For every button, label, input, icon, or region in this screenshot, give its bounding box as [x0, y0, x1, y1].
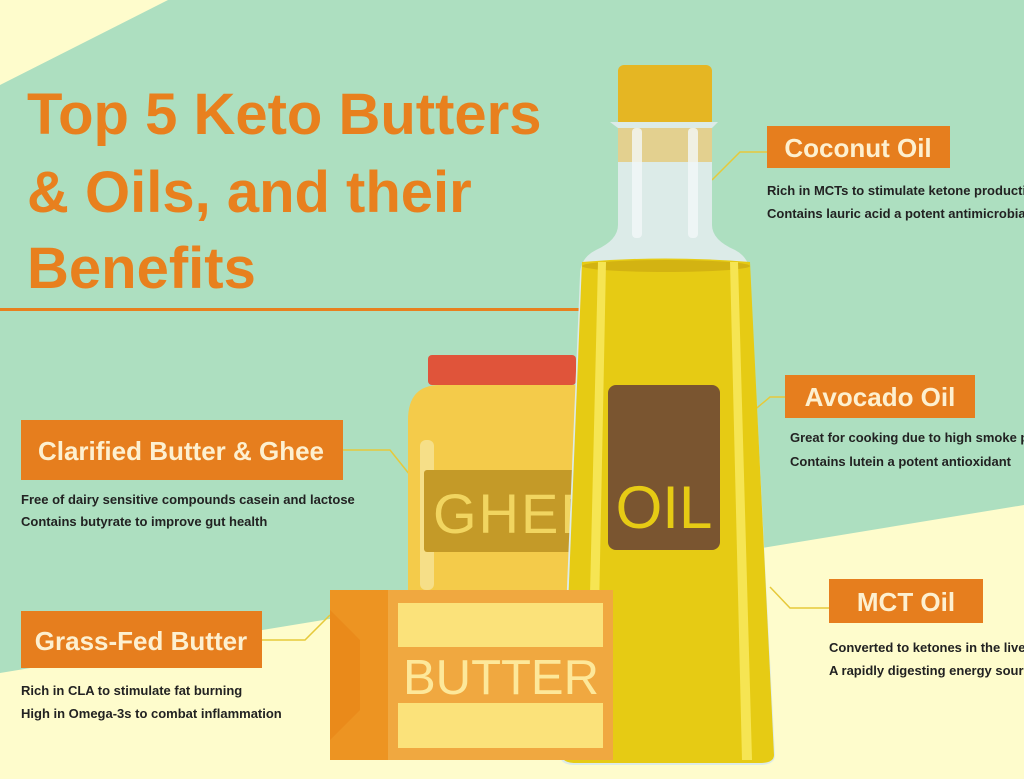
label: clarified butter & ghee: Clarified Butter & Ghee: [38, 436, 324, 466]
label: avocado oil: Avocado Oil: [805, 382, 955, 412]
ghee jar: [408, 355, 600, 600]
label: grass-fed butter: High in Omega-3s to combat inflammation: [21, 706, 282, 721]
label: clarified butter & ghee: Contains butyrate to improve gut health: [21, 514, 267, 529]
label: clarified butter & ghee: [21, 420, 355, 529]
label: avocado oil: Contains lutein a potent antioxidant: [790, 454, 1012, 469]
ghee jar: GHEE: [433, 482, 600, 545]
title: & Oils, and their: [27, 160, 472, 225]
label: avocado oil: [785, 375, 1024, 469]
butter block: BUTTER: [403, 651, 599, 705]
label: coconut oil: Coconut Oil: [784, 133, 932, 163]
label: mct oil: MCT Oil: [857, 587, 955, 617]
label: clarified butter & ghee: Free of dairy sensitive compounds casein and lactose: [21, 492, 355, 507]
connector lines: [262, 152, 829, 640]
title: Benefits: [27, 236, 256, 301]
oil bottle: OIL: [616, 474, 712, 541]
oil bottle: [560, 65, 775, 765]
label: mct oil: [829, 579, 1024, 678]
label: grass-fed butter: Grass-Fed Butter: [35, 626, 247, 656]
label: grass-fed butter: Rich in CLA to stimulate fat burning: [21, 683, 242, 698]
label: coconut oil: Contains lauric acid a potent antimicrobial: [767, 206, 1024, 221]
label: coconut oil: [767, 126, 1024, 221]
title: Top 5 Keto Butters: [27, 82, 542, 147]
butter block: [330, 590, 613, 760]
label: grass-fed butter: [21, 611, 282, 721]
title: [27, 82, 542, 301]
